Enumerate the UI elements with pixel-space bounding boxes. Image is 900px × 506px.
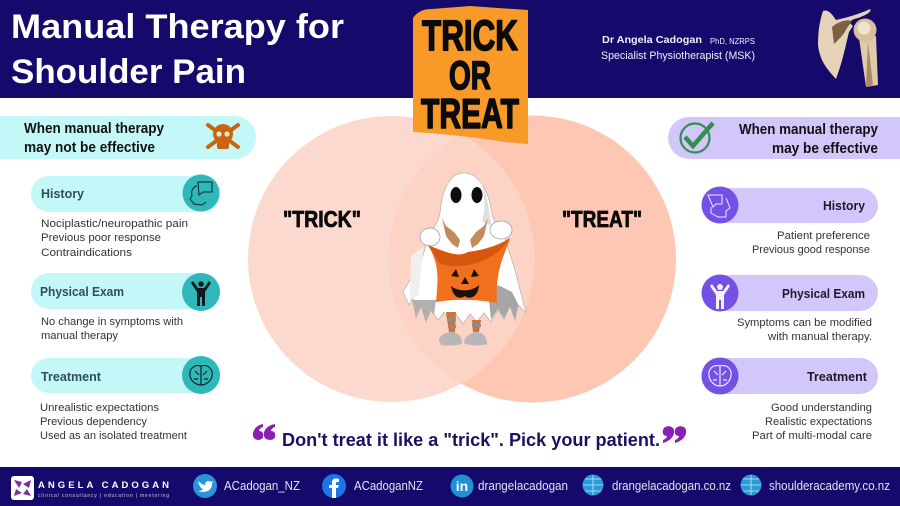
right treatment: Part of multi-modal care [752, 430, 872, 442]
trick or treat sign: TREAT [421, 90, 519, 137]
left treatment: Treatment [41, 370, 102, 384]
right heading pill: may be effective [772, 141, 878, 157]
website two [740, 474, 890, 496]
left treatment: Unrealistic expectations [40, 402, 160, 414]
trick or treat sign: OR [449, 54, 491, 98]
author credit [601, 34, 755, 62]
right physical exam: Physical Exam [782, 287, 865, 301]
left heading pill [0, 116, 256, 159]
left treatment: Used as an isolated treatment [40, 430, 187, 442]
linkedin [450, 474, 568, 498]
header band [0, 0, 900, 98]
icon: green check [680, 123, 713, 152]
website two: shoulderacademy.co.nz [769, 479, 890, 493]
twitter: ACadogan_NZ [224, 479, 300, 493]
left treatment: Previous dependency [40, 416, 148, 428]
right physical exam: Symptoms can be modified [737, 317, 872, 329]
logo: clinical consultancy | education | mentoring [38, 493, 169, 499]
footer band [0, 467, 900, 506]
right heading pill [668, 117, 900, 159]
right heading pill: When manual therapy [739, 122, 878, 138]
left history: History [41, 187, 84, 201]
icon: head with speech bubble [708, 195, 730, 217]
icon: person arms raised [191, 281, 211, 306]
facebook: ACadoganNZ [354, 479, 423, 493]
right history: History [823, 199, 865, 213]
trick or treat sign: TRICK [422, 12, 518, 60]
left history [31, 174, 220, 259]
right history: Previous good response [752, 244, 870, 256]
linkedin: drangelacadogan [478, 479, 568, 493]
trick label: "TRICK" [283, 206, 361, 232]
icon: brain [709, 366, 731, 386]
logo [11, 476, 169, 500]
ghost illustration [403, 173, 526, 346]
title [11, 8, 344, 91]
left physical exam: manual therapy [41, 330, 119, 342]
twitter [193, 474, 300, 498]
right history [702, 186, 878, 256]
left heading pill: may not be effective [24, 140, 155, 156]
venn diagram [248, 116, 676, 402]
author credit: Dr Angela Cadogan [602, 34, 702, 46]
left physical exam: Physical Exam [40, 285, 124, 299]
right treatment [702, 358, 878, 442]
website one: drangelacadogan.co.nz [612, 479, 731, 493]
icon: skull and crossbones [208, 124, 238, 149]
author credit: Specialist Physiotherapist (MSK) [601, 50, 755, 62]
right history: Patient preference [777, 230, 870, 242]
left history: Nociplastic/neuropathic pain [41, 218, 188, 230]
title: Manual Therapy for [11, 8, 344, 46]
icon: brain [190, 366, 212, 385]
author credit: PhD, NZRPS [710, 37, 755, 46]
website one [582, 474, 731, 496]
right treatment: Realistic expectations [765, 416, 872, 428]
title: Shoulder Pain [11, 53, 246, 91]
left physical exam [31, 273, 220, 342]
right physical exam: with manual therapy. [767, 331, 872, 343]
icon: shoulder bones [818, 9, 878, 87]
left treatment [31, 356, 220, 442]
icon: person arms raised [710, 284, 730, 309]
logo: ANGELA CADOGAN [38, 480, 169, 491]
left history: Contraindications [41, 247, 133, 259]
treat label: "TREAT" [562, 206, 642, 232]
right treatment: Good understanding [771, 402, 872, 414]
quote: Don't treat it like a "trick". Pick your patient. [282, 429, 660, 450]
icon: head with speech bubble [190, 182, 212, 205]
right physical exam [702, 274, 878, 343]
linkedin: in [456, 478, 468, 494]
left heading pill: When manual therapy [24, 121, 164, 137]
left history: Previous poor response [41, 232, 161, 244]
left physical exam: No change in symptoms with [41, 316, 183, 328]
trick or treat sign [413, 6, 528, 144]
facebook [322, 474, 423, 498]
right treatment: Treatment [807, 370, 868, 384]
